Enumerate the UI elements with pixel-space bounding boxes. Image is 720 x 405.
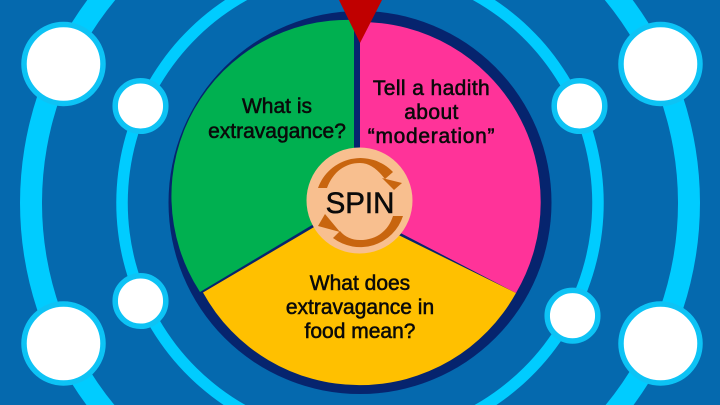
hub disc: [306, 148, 412, 254]
node: large top left: [24, 24, 103, 104]
label: extravagance question: [208, 95, 346, 143]
label: hadith prompt: Tell a hadith: [373, 77, 490, 100]
label: food question: What does: [310, 272, 410, 295]
segment: pink: [360, 22, 541, 293]
node: large bottom left: [24, 304, 103, 383]
node: large bottom right: [621, 304, 700, 383]
label: food question: [286, 272, 434, 343]
label: food question: extravagance in: [286, 296, 434, 319]
label: extravagance question: extravagance?: [208, 120, 346, 143]
spin hub: [306, 148, 412, 254]
node: small top right: [554, 81, 605, 131]
label: hadith prompt: [368, 77, 495, 148]
label: hadith prompt: about: [404, 101, 459, 124]
arrow: top: [318, 158, 402, 190]
inner ring: [116, 0, 604, 405]
wheel base: [168, 11, 552, 394]
label: food question: food mean?: [305, 320, 415, 343]
pointer: [339, 0, 382, 43]
segment: yellow: [203, 200, 516, 385]
hub label: SPIN: [326, 187, 394, 220]
label: hadith prompt: “moderation”: [368, 125, 495, 148]
node: large top right: [621, 24, 700, 104]
segment: green: [171, 20, 354, 292]
node: small bottom right: [547, 290, 598, 341]
node: small bottom left: [115, 276, 166, 326]
arrow: bottom: [318, 214, 403, 247]
node: small top left: [115, 81, 166, 131]
label: extravagance question: What is: [242, 95, 312, 118]
